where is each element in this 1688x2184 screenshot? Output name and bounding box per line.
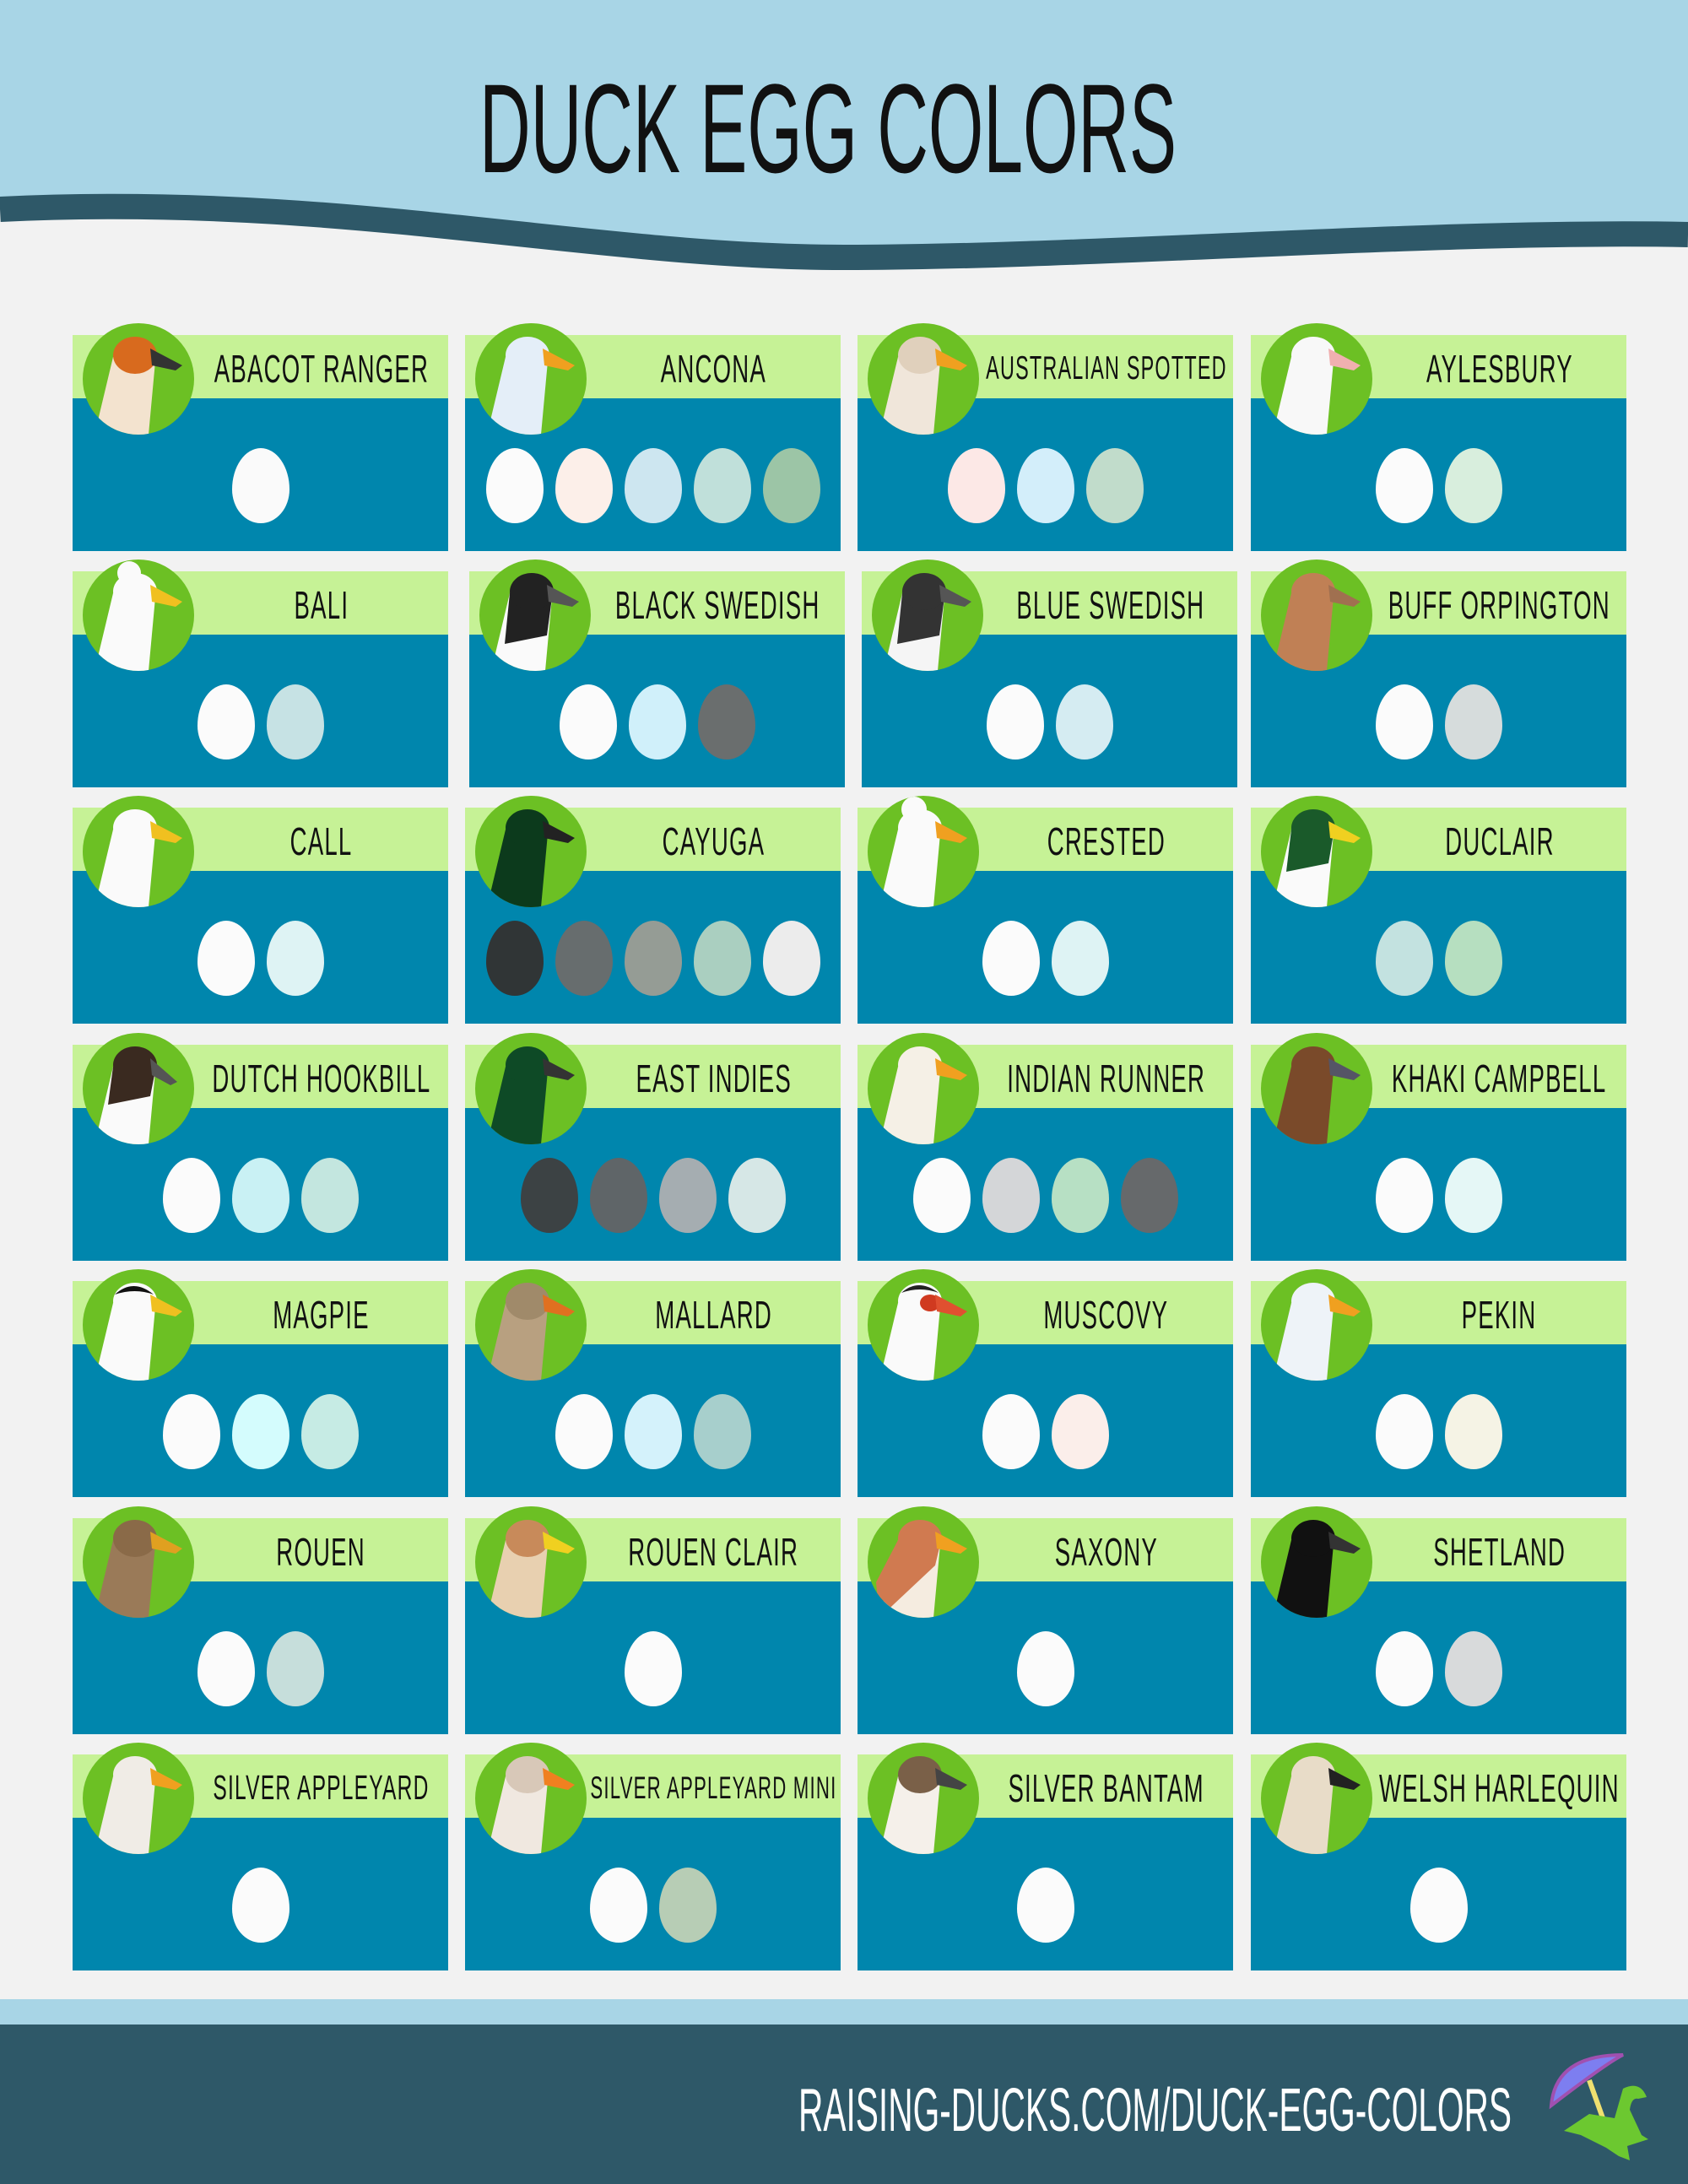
icon: duck head <box>83 560 194 671</box>
icon: duck head <box>475 1506 587 1618</box>
card: Mallard <box>465 1281 841 1497</box>
card: Rouen Clair: ROUEN CLAIR <box>629 1529 798 1573</box>
icon: duck head <box>83 1269 194 1381</box>
icon: duck head <box>868 1269 979 1381</box>
card: Cayuga <box>465 808 841 1024</box>
card: Mallard: MALLARD <box>655 1293 772 1337</box>
card: Call: CALL <box>290 819 352 862</box>
card: Pekin: PEKIN <box>1462 1293 1537 1337</box>
icon: duck head <box>83 1743 194 1854</box>
card: Abacot Ranger: ABACOT RANGER <box>214 346 429 390</box>
card: Silver Bantam <box>858 1754 1233 1970</box>
card: Ancona: ANCONA <box>661 346 766 390</box>
card: Magpie <box>73 1281 448 1497</box>
card: Cayuga: CAYUGA <box>663 819 765 862</box>
card: Pekin <box>1251 1281 1626 1497</box>
card: Saxony <box>858 1518 1233 1734</box>
header wave background <box>0 0 1688 270</box>
icon: duck head <box>868 1506 979 1618</box>
icon: duck head <box>868 1033 979 1144</box>
icon: duck head <box>83 323 194 435</box>
icon: duck head <box>868 1743 979 1854</box>
icon: duck head <box>868 323 979 435</box>
icon: duck head <box>479 560 591 671</box>
card: Australian Spotted: AUSTRALIAN SPOTTED <box>986 349 1226 387</box>
icon: duck head <box>1261 796 1372 907</box>
card: Welsh Harlequin: WELSH HARLEQUIN <box>1379 1765 1620 1809</box>
card: Rouen: ROUEN <box>277 1529 365 1573</box>
card: Australian Spotted <box>858 335 1233 551</box>
card: Silver Appleyard Mini: SILVER APPLEYARD MINI <box>590 1770 837 1804</box>
icon: duck head <box>872 560 983 671</box>
icon: duck head <box>1261 323 1372 435</box>
card: Silver Appleyard Mini <box>465 1754 841 1970</box>
card: Khaki Campbell <box>1251 1045 1626 1261</box>
card: Magpie: MAGPIE <box>273 1293 370 1337</box>
icon: duck head <box>868 796 979 907</box>
card: Black Swedish: BLACK SWEDISH <box>615 582 820 626</box>
icon: duck head <box>1261 1743 1372 1854</box>
card: Shetland <box>1251 1518 1626 1734</box>
card: Khaki Campbell: KHAKI CAMPBELL <box>1392 1057 1607 1100</box>
card: Blue Swedish <box>862 571 1237 787</box>
card: Bali <box>73 571 448 787</box>
icon: duck head <box>83 1033 194 1144</box>
card: Duclair: DUCLAIR <box>1445 819 1554 862</box>
card: Aylesbury <box>1251 335 1626 551</box>
card: Shetland: SHETLAND <box>1433 1529 1566 1573</box>
card: Silver Bantam: SILVER BANTAM <box>1008 1765 1204 1809</box>
card: Duclair <box>1251 808 1626 1024</box>
card: Crested <box>858 808 1233 1024</box>
card: Bali: BALI <box>294 582 349 626</box>
card: Welsh Harlequin <box>1251 1754 1626 1970</box>
card: Aylesbury: AYLESBURY <box>1426 346 1572 390</box>
card: Dutch Hookbill <box>73 1045 448 1261</box>
card: Crested: CRESTED <box>1047 819 1166 862</box>
icon: duck head <box>1261 560 1372 671</box>
icon: duck head <box>475 796 587 907</box>
icon: duck head <box>1261 1269 1372 1381</box>
icon: duck head <box>475 1269 587 1381</box>
card: Black Swedish <box>469 571 845 787</box>
card: Buff Orpington: BUFF ORPINGTON <box>1388 582 1610 626</box>
card: Indian Runner: INDIAN RUNNER <box>1007 1057 1205 1100</box>
icon: duck head <box>475 1743 587 1854</box>
card: Abacot Ranger <box>73 335 448 551</box>
card: Rouen <box>73 1518 448 1734</box>
card: Muscovy: MUSCOVY <box>1044 1293 1168 1337</box>
icon: duck head <box>1261 1033 1372 1144</box>
icon: duck head <box>1261 1506 1372 1618</box>
card: Call <box>73 808 448 1024</box>
card: Silver Appleyard: SILVER APPLEYARD <box>213 1768 430 1807</box>
card: Rouen Clair <box>465 1518 841 1734</box>
card: East Indies <box>465 1045 841 1261</box>
card: Silver Appleyard <box>73 1754 448 1970</box>
footer <box>0 1999 1688 2184</box>
card: Muscovy <box>858 1281 1233 1497</box>
icon: duck head <box>475 323 587 435</box>
card: Ancona <box>465 335 841 551</box>
card: Saxony: SAXONY <box>1054 1529 1158 1573</box>
icon: duck with umbrella logo <box>1550 2053 1648 2160</box>
card: Buff Orpington <box>1251 571 1626 787</box>
card: Dutch Hookbill: DUTCH HOOKBILL <box>212 1057 430 1100</box>
icon: duck head <box>83 1506 194 1618</box>
card: Indian Runner <box>858 1045 1233 1261</box>
icon: duck head <box>475 1033 587 1144</box>
icon: duck head <box>83 796 194 907</box>
card: East Indies: EAST INDIES <box>636 1057 792 1100</box>
card: Blue Swedish: BLUE SWEDISH <box>1016 582 1204 626</box>
